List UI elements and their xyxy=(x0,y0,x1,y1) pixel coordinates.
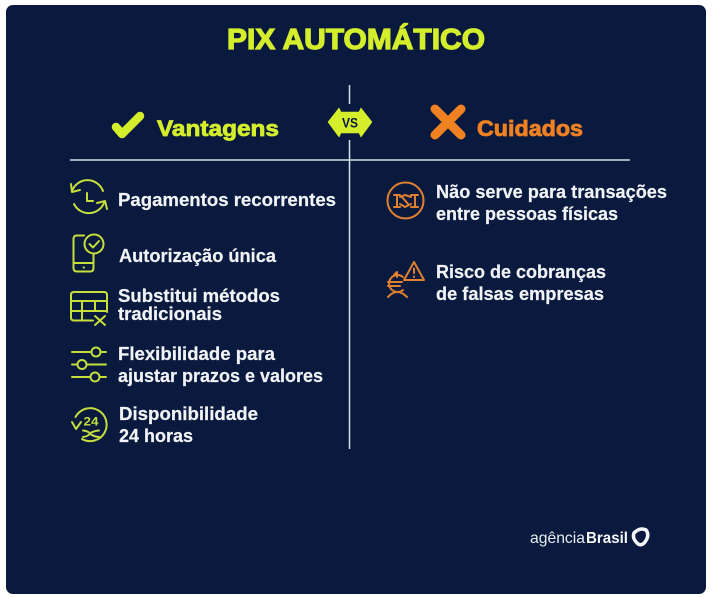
item: Substitui métodos tradicionais xyxy=(71,286,280,325)
item: Risco de cobranças de falsas empresas: Risco de cobranças xyxy=(436,262,606,282)
title: PIX AUTOMÁTICO xyxy=(227,22,485,56)
vertical divider xyxy=(348,85,350,449)
item: Risco de cobranças de falsas empresas xyxy=(388,262,606,304)
icon: 24 hours circle xyxy=(72,408,107,441)
icon: phone with check badge xyxy=(74,234,104,272)
item: Disponibilidade 24 horas xyxy=(72,404,258,446)
item: Disponibilidade 24 horas: 24 horas xyxy=(119,426,193,446)
icon: check mark xyxy=(116,116,140,134)
icon: cross mark xyxy=(435,109,461,135)
item: Disponibilidade 24 horas: Disponibilidade xyxy=(119,404,258,424)
icon: euro with warning triangle xyxy=(388,262,424,297)
horizontal divider xyxy=(70,159,630,161)
badge: VS: VS xyxy=(342,114,358,130)
item: Não serve para transações entre pessoas físicas: Não serve para transações xyxy=(436,182,667,202)
logo: agência Brasil: agência xyxy=(530,530,585,547)
item: Autorização única: Autorização única xyxy=(119,246,277,266)
item: Disponibilidade 24 horas: 24 xyxy=(84,414,99,428)
item: Flexibilidade para ajustar prazos e valores xyxy=(72,344,323,386)
item: Substitui métodos tradicionais: Substitui métodos xyxy=(118,286,280,306)
item: Não serve para transações entre pessoas físicas: entre pessoas físicas xyxy=(436,204,618,224)
heading: Vantagens xyxy=(116,116,279,141)
badge: VS xyxy=(328,108,372,137)
heading: Cuidados: Cuidados xyxy=(477,116,583,141)
item: Não serve para transações entre pessoas físicas xyxy=(388,182,667,224)
item: Pagamentos recorrentes xyxy=(71,180,336,213)
icon: handshake in circle xyxy=(388,182,424,218)
icon: clock with cycle arrows xyxy=(71,180,107,213)
item: Pagamentos recorrentes: Pagamentos recorrentes xyxy=(118,190,336,210)
icon: sliders xyxy=(72,348,106,382)
item: Risco de cobranças de falsas empresas: de falsas empresas xyxy=(436,284,604,304)
logo: agência Brasil: Brasil xyxy=(586,530,628,547)
item: Autorização única xyxy=(74,234,277,272)
icon: table with x xyxy=(71,292,107,325)
heading: Vantagens: Vantagens xyxy=(157,116,279,141)
item: Flexibilidade para ajustar prazos e valores: ajustar prazos e valores xyxy=(118,366,323,386)
item: Flexibilidade para ajustar prazos e valores: Flexibilidade para xyxy=(118,344,276,364)
heading: Cuidados xyxy=(435,109,583,141)
item: Substitui métodos tradicionais: tradicionais xyxy=(118,304,222,324)
icon: logo mark xyxy=(633,529,648,545)
logo: agência Brasil xyxy=(530,529,648,547)
